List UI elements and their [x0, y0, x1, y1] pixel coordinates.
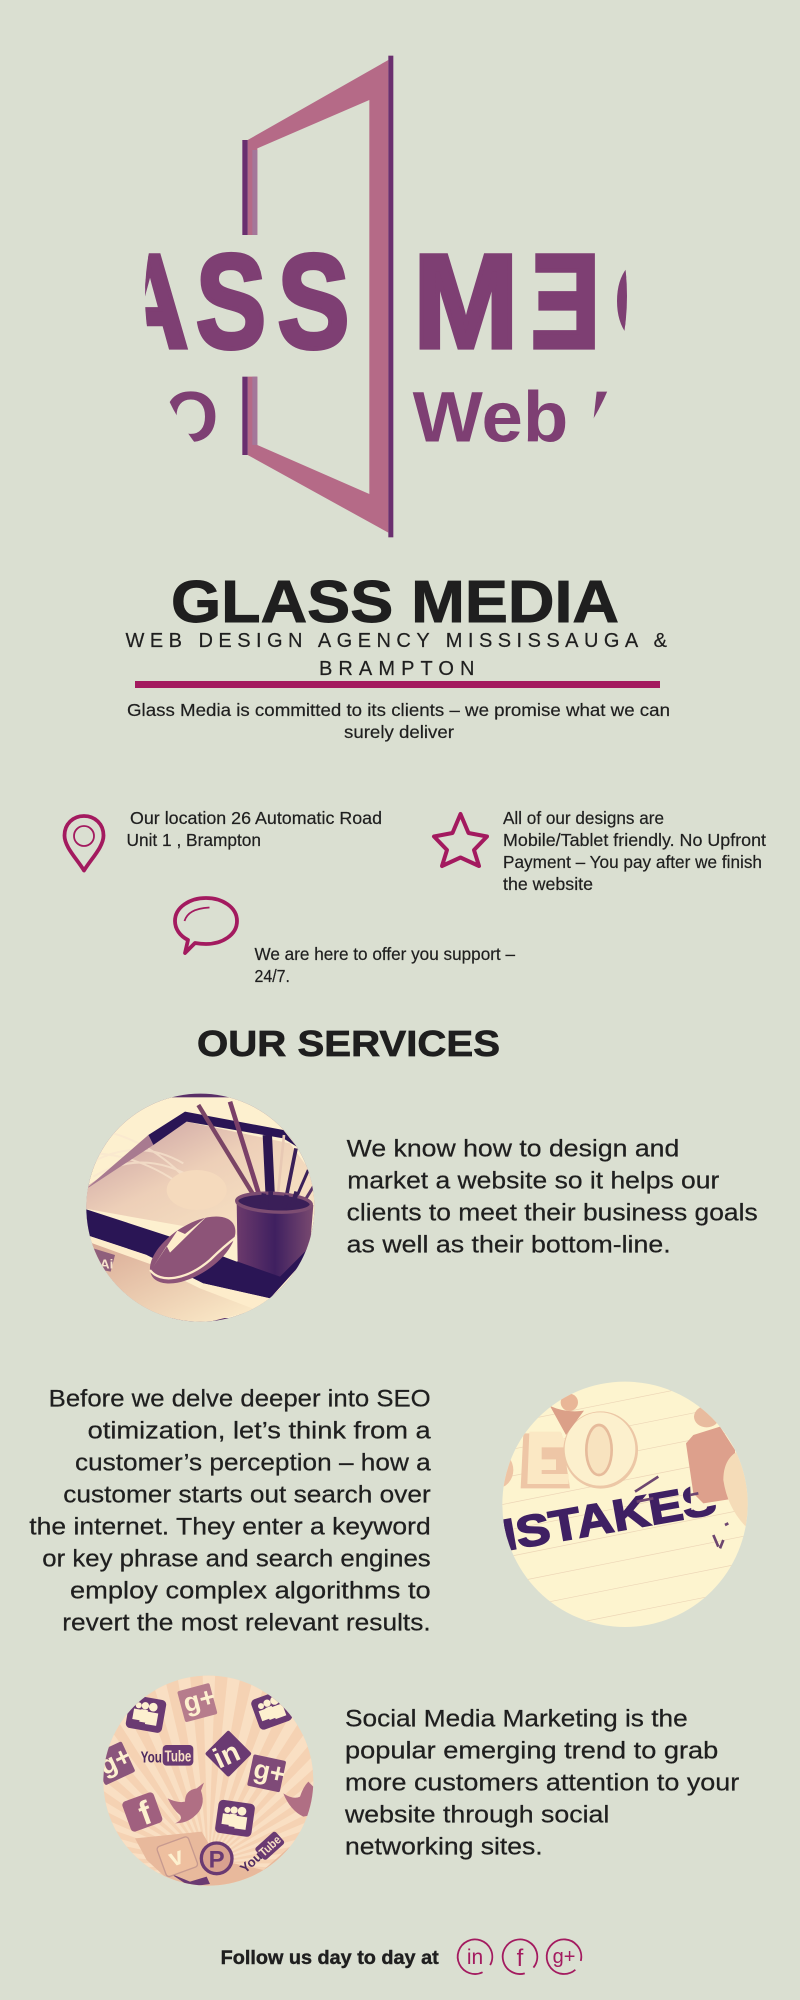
- service text: web design: [347, 1136, 758, 1259]
- google plus tile 2: g+: [251, 1754, 288, 1790]
- icon: location pin: [64, 816, 104, 870]
- icon: linkedin: in: [467, 1946, 483, 1969]
- logo: glass media door mark: [145, 56, 627, 538]
- location text: [126, 808, 382, 850]
- google plus tile 3: [103, 1742, 135, 1785]
- myspace tile 2: [251, 1694, 292, 1730]
- youtube rotated: Tube: [256, 1832, 284, 1859]
- service text: social media: [344, 1706, 739, 1861]
- accent bar: [135, 681, 660, 688]
- hand: [723, 1452, 748, 1526]
- service text: social media: networking sites.: [345, 1834, 543, 1861]
- figure on letters: [561, 1394, 578, 1411]
- eraser crumbs: [635, 1477, 728, 1548]
- youtube logo: You: [141, 1749, 162, 1766]
- service text: social media: more customers attention to your: [345, 1770, 739, 1797]
- icon: facebook: [499, 1935, 541, 1978]
- service text: web design: as well as their bottom-line.: [347, 1232, 671, 1259]
- twitter bird 1: [168, 1783, 204, 1823]
- icon: facebook: f: [517, 1945, 524, 1972]
- vine tile: v: [165, 1843, 187, 1873]
- responsive design text: Payment – You pay after we finish: [503, 852, 762, 872]
- footer call to action: Follow us day to day at: [221, 1948, 439, 1969]
- pinterest badge: [201, 1843, 232, 1874]
- service text: seo: or key phrase and search engines: [42, 1546, 431, 1573]
- mouse: [150, 1216, 236, 1284]
- desk: [92, 1243, 253, 1322]
- tagline: [127, 700, 670, 742]
- youtube logo: Tube: [165, 1748, 191, 1765]
- youtube rotated: You: [237, 1849, 265, 1876]
- google plus tile 3: g+: [94, 1740, 136, 1781]
- responsive design text: Mobile/Tablet friendly. No Upfront: [503, 830, 766, 850]
- tagline: Glass Media is committed to its clients – we promise what we can: [127, 700, 670, 720]
- support text: [254, 944, 515, 986]
- pinterest badge: P: [209, 1846, 225, 1873]
- icon: linkedin: [452, 1934, 498, 1980]
- icon: speech bubble: [175, 898, 237, 953]
- service text: web design: market a website so it helps our: [347, 1168, 719, 1195]
- subtitle: [126, 630, 668, 680]
- responsive design text: the website: [503, 874, 593, 894]
- logo lettering clipped by circle: M: [413, 227, 518, 376]
- service text: seo: the internet. They enter a keyword: [29, 1514, 431, 1541]
- app badge: [93, 1248, 115, 1272]
- subtitle: WEB DESIGN AGENCY MISSISSAUGA &: [126, 630, 668, 652]
- linkedin diamond: [205, 1730, 252, 1777]
- location text: Unit 1 , Brampton: [126, 830, 261, 850]
- support text: We are here to offer you support –: [254, 944, 515, 964]
- logo lettering clipped by circle: [145, 252, 627, 442]
- eraser: [686, 1427, 735, 1503]
- logo door frame: [242, 56, 393, 537]
- service text: web design: clients to meet their business goals: [347, 1200, 758, 1227]
- service text: seo: employ complex algorithms to: [70, 1578, 431, 1605]
- logo lettering clipped by circle: E: [531, 227, 600, 376]
- tagline: surely deliver: [344, 722, 454, 742]
- image: social media icons: [103, 1676, 314, 1886]
- pencils: [196, 1104, 254, 1193]
- service text: social media: Social Media Marketing is the: [345, 1706, 688, 1733]
- youtube rotated: [239, 1832, 284, 1872]
- icon: google plus: [540, 1932, 588, 1981]
- subtitle: BRAMPTON: [319, 658, 474, 680]
- twitter bird 2: [284, 1782, 314, 1817]
- facebook tile: [122, 1792, 162, 1832]
- SEO O: [563, 1411, 638, 1489]
- service text: seo: otimization, let’s think from a: [88, 1418, 431, 1445]
- myspace tile 3: [215, 1799, 255, 1837]
- responsive design text: All of our designs are: [503, 808, 664, 828]
- service text: seo: customer’s perception – how a: [75, 1450, 431, 1477]
- cup: [237, 1202, 313, 1277]
- service text: seo: Before we delve deeper into SEO: [49, 1386, 431, 1413]
- image: SEO mistakes being erased: [502, 1382, 748, 1627]
- icon: star: [434, 814, 487, 866]
- service text: seo: customer starts out search over: [63, 1482, 431, 1509]
- service text: seo: [29, 1386, 431, 1637]
- SEO S fragment: [504, 1460, 514, 1486]
- logo lettering clipped by circle: O: [614, 227, 714, 376]
- service text: seo: revert the most relevant results.: [62, 1610, 431, 1637]
- service text: web design: We know how to design and: [347, 1136, 679, 1163]
- linkedin diamond: in: [208, 1736, 245, 1775]
- logo lettering clipped by circle: O: [163, 378, 218, 458]
- google plus tile 1: g+: [180, 1681, 219, 1718]
- tablet screen: [83, 1122, 317, 1237]
- SEO E: [521, 1432, 570, 1488]
- vine tile: [156, 1836, 198, 1877]
- youtube logo: [141, 1745, 193, 1766]
- service text: social media: website through social: [344, 1802, 609, 1829]
- ISTAKES wordmark: ISTAKES: [498, 1475, 720, 1561]
- logo lettering clipped by circle: A: [112, 227, 188, 376]
- logo lettering clipped by circle: S: [196, 227, 266, 376]
- heading: our services: OUR SERVICES: [197, 1023, 500, 1064]
- erased patch: [690, 1486, 716, 1510]
- logo lettering clipped by circle: Web: [413, 378, 568, 458]
- open laptop: [135, 1832, 290, 1886]
- ruled notebook lines: [502, 1390, 744, 1621]
- tablet bezel bottom: [83, 1208, 317, 1298]
- myspace tile 1: [126, 1697, 166, 1733]
- responsive design text: [503, 808, 766, 894]
- image: design tablet, mouse and pencil cup: [83, 1094, 317, 1323]
- icon: google plus: g+: [553, 1946, 575, 1968]
- service text: social media: popular emerging trend to grab: [345, 1738, 718, 1765]
- support text: 24/7.: [254, 966, 290, 986]
- logo lettering clipped by circle: S: [278, 227, 349, 376]
- facebook tile: f: [134, 1794, 158, 1833]
- sunburst rays: [104, 1676, 314, 1873]
- title: GLASS MEDIA: [171, 569, 619, 635]
- location text: Our location 26 Automatic Road: [130, 808, 382, 828]
- tablet bezel top: [148, 1112, 297, 1147]
- image: design tablet, mouse and pencil cup: Ai: [100, 1256, 113, 1271]
